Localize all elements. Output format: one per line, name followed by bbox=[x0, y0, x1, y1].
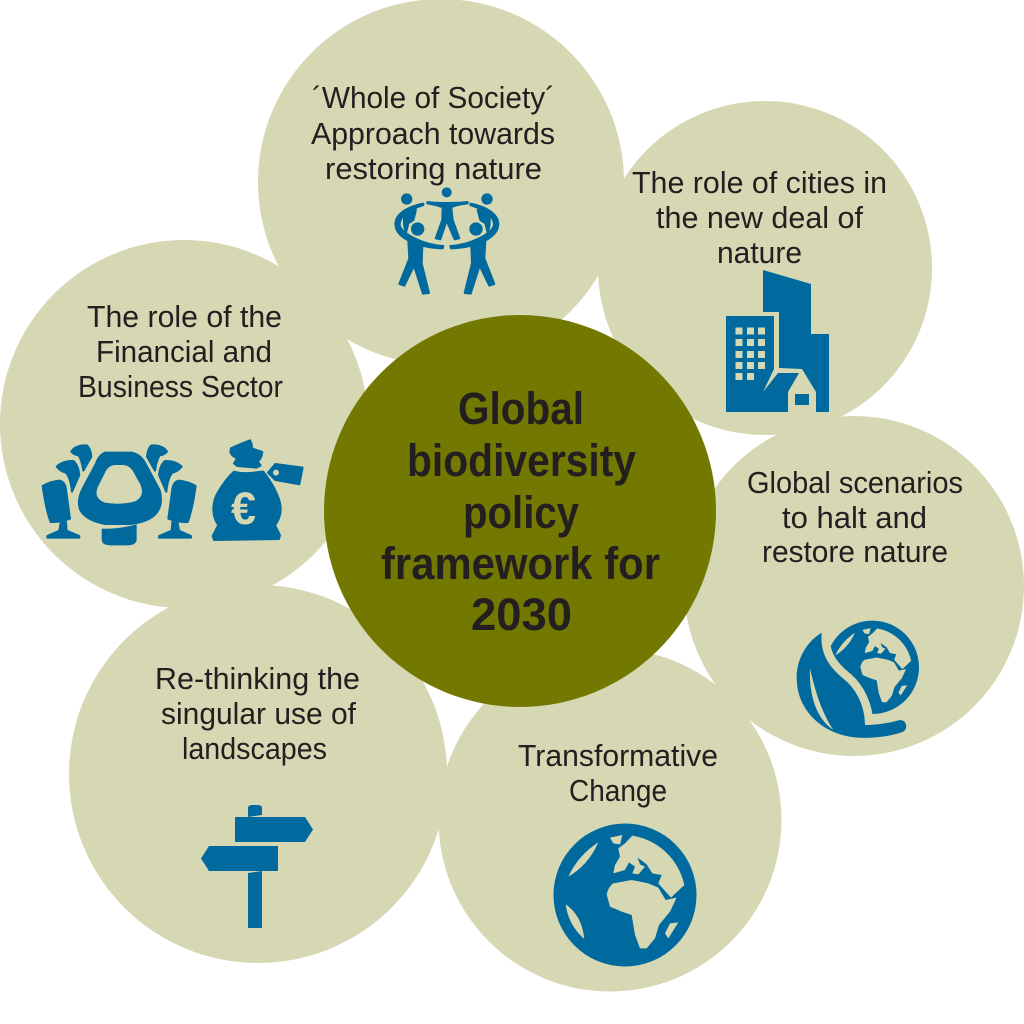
text: role of cities heading bbox=[632, 165, 887, 270]
text: whole of society heading: restoring nature bbox=[325, 151, 542, 186]
icon: earth globe bbox=[554, 824, 696, 966]
text: global scenarios heading: Global scenarios bbox=[747, 465, 963, 500]
text: whole of society heading bbox=[311, 80, 555, 186]
icon: money bag with euro and tag bbox=[213, 440, 303, 540]
panel: central circle bbox=[324, 315, 716, 707]
icon: globe held by leaf bbox=[797, 621, 919, 738]
title: Global bbox=[458, 383, 584, 434]
text: global scenarios heading: restore nature bbox=[762, 534, 948, 569]
text: global scenarios heading bbox=[747, 465, 963, 569]
title: policy bbox=[463, 487, 579, 538]
text: whole of society heading: ´Whole of Society´ bbox=[312, 80, 555, 115]
panel: global scenarios bbox=[684, 416, 1024, 756]
text: financial heading: Financial and bbox=[96, 334, 272, 369]
title bbox=[381, 383, 660, 640]
text: landscapes heading bbox=[155, 661, 360, 766]
icon: people in a circle bbox=[395, 187, 498, 294]
title: 2030 bbox=[471, 589, 572, 640]
panel: financial and business sector bbox=[0, 240, 368, 608]
text: role of cities heading: nature bbox=[717, 235, 802, 270]
text: financial heading: Business Sector bbox=[78, 369, 283, 404]
text: role of cities heading: the new deal of bbox=[656, 200, 863, 235]
text: transformative change heading: Transformative bbox=[518, 738, 718, 773]
icon: city buildings and house bbox=[726, 270, 829, 412]
panel: transformative change bbox=[438, 648, 782, 992]
text: landscapes heading: singular use of bbox=[161, 696, 356, 731]
text: transformative change heading bbox=[518, 738, 718, 808]
title: biodiversity bbox=[407, 435, 636, 486]
text: transformative change heading: Change bbox=[569, 773, 667, 808]
icon: money bag with euro and tag: € bbox=[231, 483, 256, 534]
panel: role of cities bbox=[598, 101, 932, 435]
text: role of cities heading: The role of cities in bbox=[632, 165, 887, 200]
icon: meeting table and chairs bbox=[43, 445, 196, 545]
text: landscapes heading: landscapes bbox=[182, 731, 327, 766]
title: framework for bbox=[381, 538, 660, 589]
text: financial heading: The role of the bbox=[87, 299, 282, 334]
text: landscapes heading: Re-thinking the bbox=[155, 661, 360, 696]
panel: landscapes bbox=[69, 585, 447, 963]
text: financial heading bbox=[78, 299, 283, 404]
text: global scenarios heading: to halt and bbox=[782, 500, 927, 535]
panel: whole of society bbox=[258, 0, 624, 365]
icon: signpost bbox=[201, 805, 313, 928]
text: whole of society heading: Approach towards bbox=[311, 116, 555, 151]
